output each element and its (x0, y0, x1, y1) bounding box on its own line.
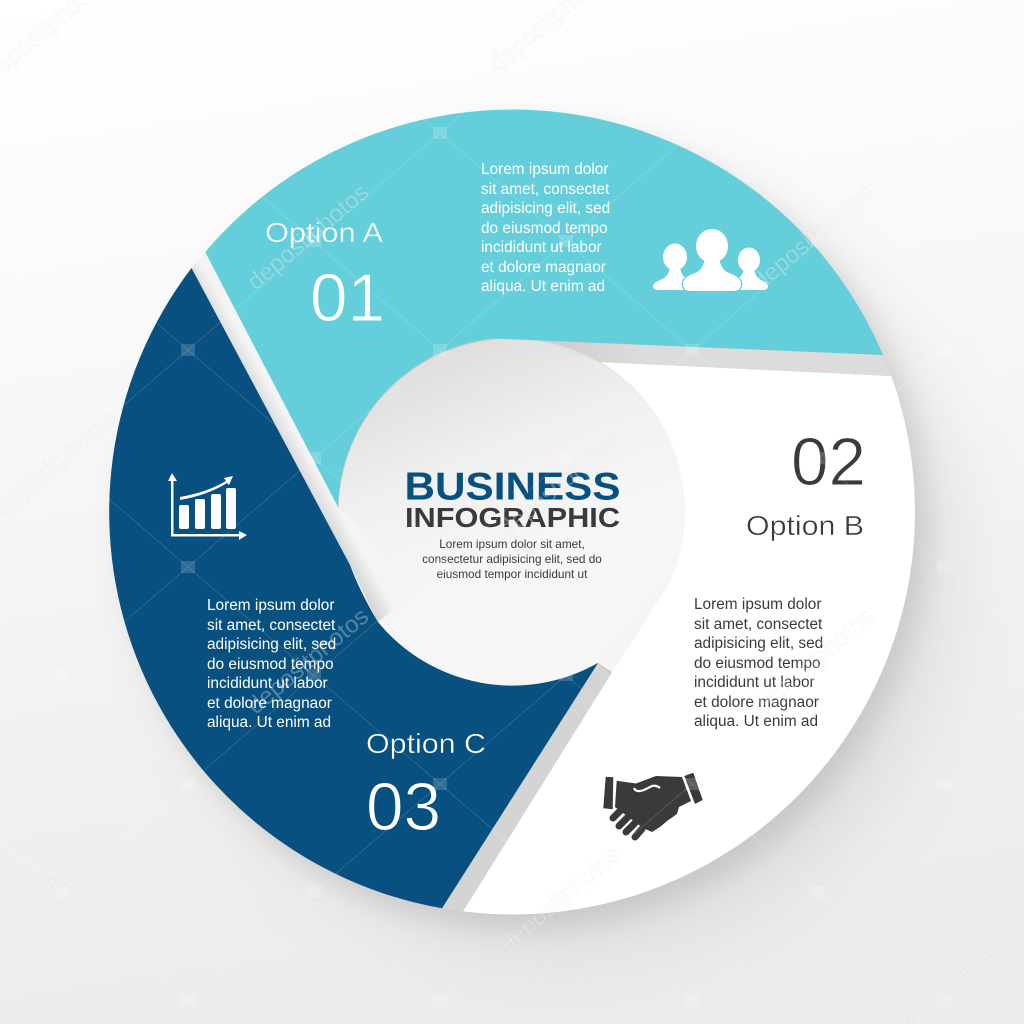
text: center description: consectetur adipisicing elit, sed do (422, 552, 602, 566)
icon: people group (653, 229, 768, 291)
text: option A label: Option A (265, 217, 383, 248)
shadow band beside navy segment (442, 663, 611, 911)
text: option C body: do eiusmod tempo (207, 656, 334, 673)
text: option A body: sit amet, consectet (481, 181, 610, 198)
text: option B number: 02 (791, 424, 866, 500)
text: option C body: incididunt ut labor (207, 675, 328, 692)
text: option A number: 01 (310, 260, 385, 336)
watermark: depositphotos (242, 179, 374, 296)
text: option A body: adipisicing elit, sed (481, 200, 610, 217)
panel: option B white segment (442, 339, 915, 914)
text: option A body: et dolore magnaor (481, 259, 606, 276)
text: center description: Lorem ipsum dolor sit amet, (439, 537, 585, 551)
text: option C body: aliqua. Ut enim ad (207, 714, 331, 731)
watermark: depositphotos (494, 841, 626, 958)
watermark: depositphotos (242, 603, 374, 720)
heading: infographic: INFOGRAPHIC (405, 502, 620, 533)
wedge of disc colour under the white segment (598, 582, 670, 672)
text: option C body: et dolore magnaor (207, 695, 332, 712)
watermark: depositphotos (747, 603, 879, 720)
text: option C body: sit amet, consectet (207, 617, 336, 634)
center title (404, 466, 620, 581)
watermark: depositphotos (494, 426, 626, 543)
panel: option A teal segment (205, 110, 883, 507)
icon: handshake (603, 773, 703, 837)
text: option A body: do eiusmod tempo (481, 220, 608, 237)
text: center description: eiusmod tempor incididunt ut (437, 567, 588, 581)
text: option B body: adipisicing elit, sed (694, 635, 823, 652)
text: option B body: Lorem ipsum dolor (694, 596, 821, 613)
text: option A body: aliqua. Ut enim ad (481, 278, 605, 295)
text: option C number: 03 (366, 769, 441, 845)
watermark: depositphotos (747, 179, 879, 296)
panel: fold between teal and navy segments (192, 252, 418, 622)
panel: option C navy segment (109, 268, 598, 908)
icon: growth bar chart (168, 473, 247, 540)
text: option C body: Lorem ipsum dolor (207, 597, 334, 614)
text: option B body: do eiusmod tempo (694, 655, 821, 672)
text: option C body: adipisicing elit, sed (207, 636, 336, 653)
text: option A body: incididunt ut labor (481, 239, 602, 256)
heading: business: BUSINESS (404, 466, 620, 508)
long shadow of the ring (126, 128, 960, 960)
text: option C label: Option C (366, 728, 486, 759)
text: option B body: et dolore magnaor (694, 694, 819, 711)
text: option B body: sit amet, consectet (694, 616, 823, 633)
center disc (338, 338, 686, 686)
text: option A body: Lorem ipsum dolor (481, 161, 608, 178)
text: option B label: Option B (746, 510, 864, 541)
text: option B body: incididunt ut labor (694, 674, 815, 691)
text: option B body: aliqua. Ut enim ad (694, 713, 818, 730)
shadow band under teal segment (530, 339, 891, 376)
